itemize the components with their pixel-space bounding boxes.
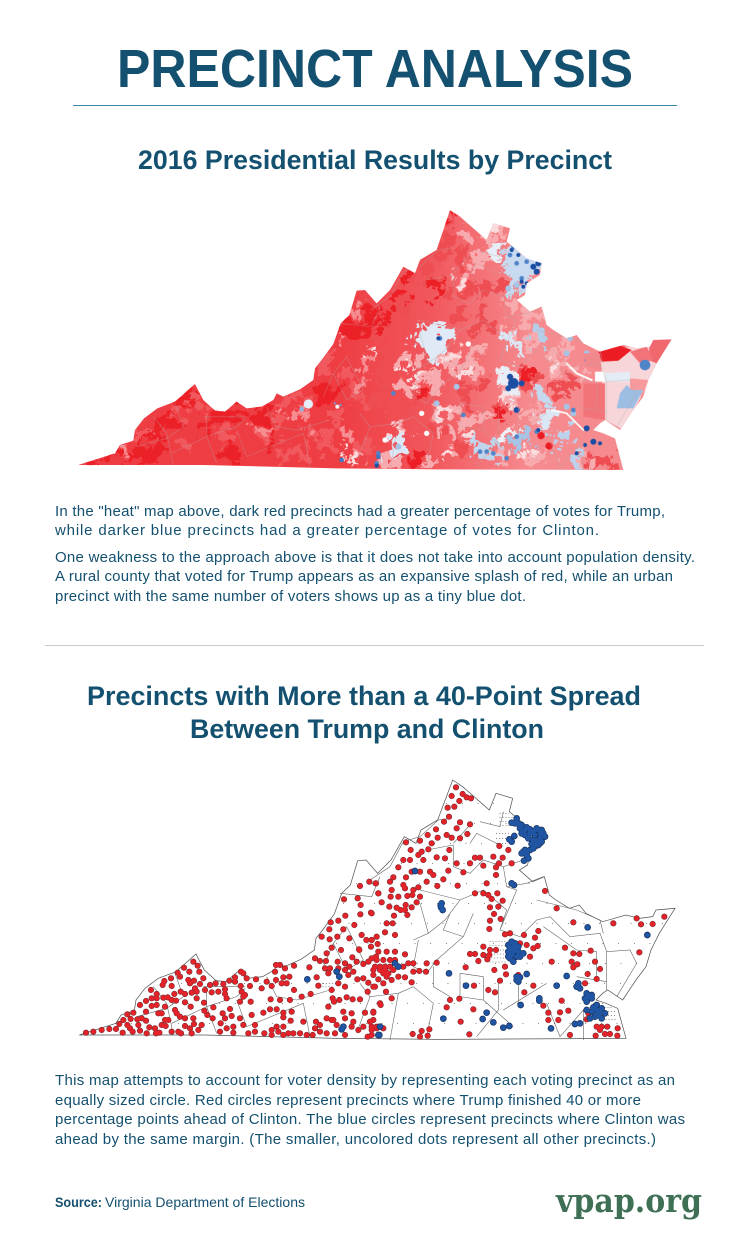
heat map of Virginia precincts xyxy=(70,200,687,477)
title: PRECINCT ANALYSIS xyxy=(117,39,633,99)
paragraph: heat map explanation xyxy=(54,503,665,539)
paragraph: weakness of heat map xyxy=(55,549,695,605)
heading: 40-point spread: Precincts with More than a 40-Point Spread xyxy=(87,681,641,711)
paragraph: weakness of heat map: precinct with the same number of voters shows up as a tiny blue dot. xyxy=(55,588,526,605)
paragraph: dot map explanation: percentage points ahead of Clinton. The blue circles represent precincts where Clinton was xyxy=(55,1111,685,1128)
paragraph: weakness of heat map: A rural county that voted for Trump appears as an expansive splash of red, while an urban xyxy=(55,568,673,585)
dot map of Virginia precincts xyxy=(79,780,675,1040)
blue circles: Clinton +40 xyxy=(307,818,647,1035)
source credit: Virginia Department of Elections xyxy=(105,1194,305,1210)
western detail xyxy=(302,403,378,466)
paragraph: heat map explanation: while darker blue precincts had a greater percentage of votes for Clinton. xyxy=(54,522,599,539)
unfiltered details xyxy=(377,247,672,463)
heading: 40-point spread xyxy=(87,681,641,744)
red circles: Trump +40 xyxy=(86,787,664,1037)
paragraph: weakness of heat map: One weakness to the approach above is that it does not take into account population density. xyxy=(55,549,695,566)
heading: 2016 presidential results: 2016 Presidential Results by Precinct xyxy=(138,145,612,175)
paragraph: heat map explanation: In the "heat" map above, dark red precincts had a greater percentage of votes for Trump, xyxy=(55,503,665,520)
Eastern Shore and Northern Neck shapes xyxy=(600,339,672,430)
paragraph: dot map explanation: ahead by the same margin. (The smaller, uncolored dots represent all other precincts.) xyxy=(55,1131,656,1148)
paragraph: dot map explanation: equally sized circle. Red circles represent precincts where Trump finished 40 or more xyxy=(55,1092,641,1109)
paragraph: dot map explanation xyxy=(55,1072,685,1148)
paragraph: dot map explanation: This map attempts to account for voter density by representing each voting precinct as an xyxy=(55,1072,675,1089)
source credit: Source: xyxy=(55,1194,102,1210)
state outline xyxy=(79,780,675,1039)
heading: 40-point spread: Between Trump and Clinton xyxy=(190,714,544,744)
logo: vpap.org: vpap.org xyxy=(555,1181,702,1220)
small uncolored dots xyxy=(100,803,670,1023)
